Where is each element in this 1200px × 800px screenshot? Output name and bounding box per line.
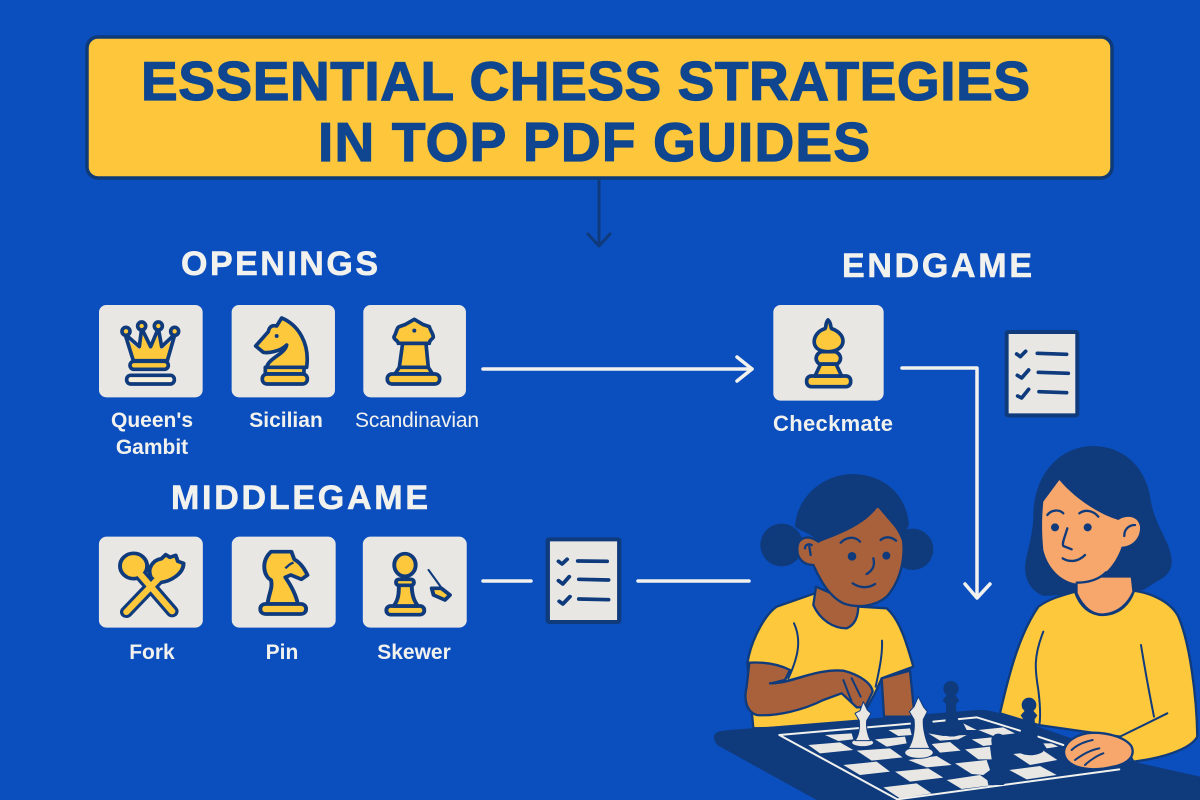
label: Queen's Gambit: Gambit [116, 436, 188, 459]
arrow: title to sections [588, 180, 610, 246]
icon: checklist endgame [1007, 332, 1077, 415]
icon: queen crown card [99, 305, 203, 397]
connector: checklist to players [638, 579, 749, 583]
heading: endgame: ENDGAME [842, 247, 1032, 285]
connector: skewer to checklist [483, 579, 531, 583]
black pawn right [1013, 698, 1043, 755]
figure: girl [745, 474, 933, 728]
title banner [87, 37, 1112, 178]
arrow: openings to endgame [483, 357, 752, 381]
table [714, 710, 1200, 800]
white king large [905, 697, 933, 758]
chess pieces [852, 681, 1043, 785]
label: Scandinavian: Scandinavian [355, 409, 479, 432]
black pawn front [987, 734, 1012, 785]
chess board [779, 717, 1119, 799]
arrow: endgame to players [902, 368, 990, 598]
label: Queen's Gambit: Queen's [111, 409, 193, 432]
label: Sicilian: Sicilian [249, 409, 323, 432]
label: Checkmate: Checkmate [773, 411, 893, 436]
icon: pin knight card [232, 537, 336, 628]
icon: rook card [363, 305, 466, 397]
white king small [852, 702, 874, 747]
heading: middlegame: MIDDLEGAME [171, 479, 428, 517]
label: Fork: Fork [129, 641, 175, 664]
icon: checklist middlegame [548, 539, 619, 622]
title banner: ESSENTIAL CHESS STRATEGIES [141, 50, 1030, 112]
icon: knight card [232, 305, 335, 397]
label: Queen's Gambit [111, 409, 193, 459]
icon: bishop card [773, 305, 884, 401]
black pawn back [942, 681, 965, 737]
icon: skewer pawn card [363, 537, 467, 628]
figure: woman [1000, 446, 1197, 762]
woman's hand [1064, 733, 1133, 769]
title banner: IN TOP PDF GUIDES [318, 111, 870, 173]
label: Pin: Pin [266, 641, 298, 664]
icon: fork and spoon card [99, 537, 203, 628]
label: Skewer: Skewer [377, 641, 451, 664]
heading: openings: OPENINGS [181, 245, 378, 283]
illustration: players at chess board [714, 446, 1200, 800]
